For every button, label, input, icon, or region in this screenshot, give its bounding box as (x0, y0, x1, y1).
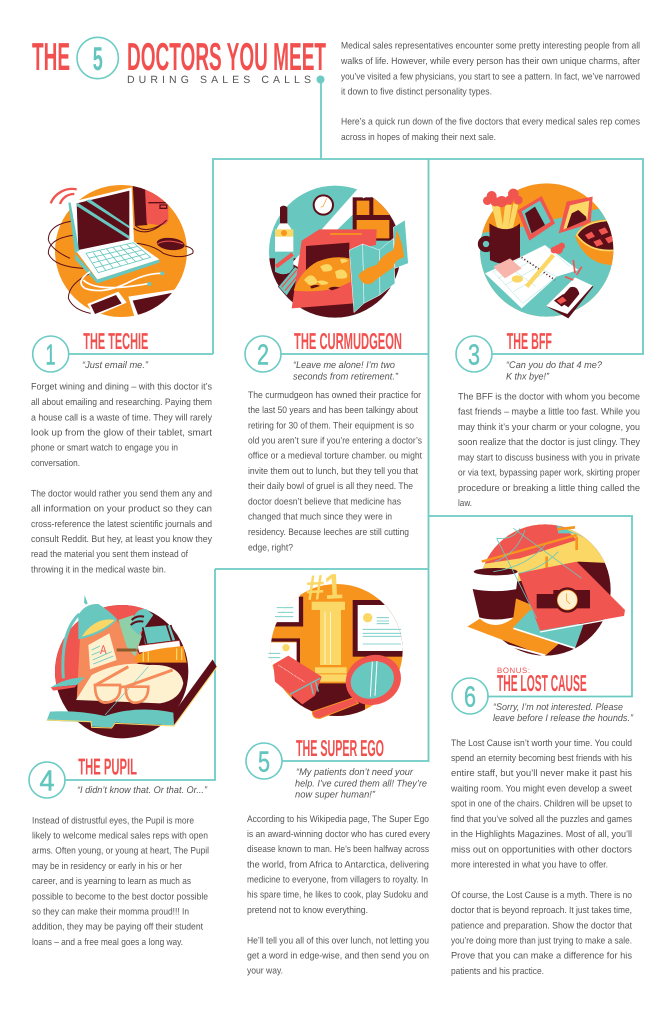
body text: arms. Often young, or young at heart, The Pupil (32, 845, 209, 856)
body text: Of course, the Lost Cause is a myth. There is no (451, 889, 632, 900)
body text: doctor that is beyond reproach. It just takes time, (451, 904, 632, 915)
illustration: laptop and devices (48, 183, 193, 318)
body text: get a word in edge-wise, and then send you on (247, 950, 429, 961)
body text: Instead of distrustful eyes, the Pupil is more (32, 814, 194, 825)
body text: look up from the glow of their tablet, smart (31, 426, 212, 437)
illustration: column, diplomas and mirror (265, 566, 408, 718)
quote: leave before I release the hounds.” (493, 713, 634, 724)
number 6 (452, 678, 488, 714)
body text: patients and his practice. (451, 965, 544, 976)
quote: “Just email me.” (82, 360, 149, 371)
body text: soon realize that the doctor is just clingy. They (458, 436, 640, 447)
quote: “Leave me alone! I’m two (293, 360, 396, 371)
body text: Prove that you can make a difference for his (451, 950, 632, 961)
body text: fast friends – maybe a little too fast. While you (458, 406, 640, 417)
title (32, 36, 326, 86)
body text (248, 389, 422, 552)
quote: “Can you do that 4 me? (506, 360, 603, 371)
panel: the pupil (29, 595, 217, 947)
intro text: across in hopes of making their next sale. (341, 131, 496, 142)
quote: help. I’ve cured them all! They’re (295, 778, 427, 789)
number 2: 2 (257, 340, 269, 372)
panel: the bff: THE BFF (507, 328, 552, 354)
number 4: 4 (40, 766, 54, 798)
number 1: 1 (46, 340, 56, 372)
quote (493, 702, 634, 724)
body text: law. (458, 497, 472, 508)
body text: spot in one of the chairs. Children will be upset to (451, 798, 632, 808)
body text: so they can make their momma proud!!! In (32, 905, 189, 916)
body text: may think it’s your charm or your cologne, you (458, 421, 640, 432)
body text: waiting room. You might even develop a sweet (450, 782, 632, 793)
body text: likely to welcome medical sales reps with open (32, 830, 208, 841)
body text: find that you’ve solved all the puzzles and games (451, 813, 632, 824)
number 5 (246, 743, 282, 779)
body text: patience and preparation. Show the doctor that (451, 919, 632, 930)
body text: loans – and a free meal goes a long way. (32, 936, 183, 947)
body text: a house call is a waste of time. They will rarely (31, 411, 212, 422)
body text: disease known to man. He’s been halfway across (247, 843, 429, 854)
number 2 (245, 336, 281, 372)
body text: more interested in what you have to offer. (451, 858, 608, 870)
body text: is an award-winning doctor who has cured every (247, 828, 430, 839)
body text (32, 814, 209, 947)
quote: seconds from retirement.” (293, 372, 399, 382)
title: DURING SALES CALLS (127, 74, 311, 86)
intro text: walks of life. However, while every person has their own unique charms, after (340, 55, 640, 66)
number 5: 5 (258, 746, 270, 778)
number 1 (33, 336, 69, 372)
heading: BONUS: (497, 666, 530, 675)
body text: may start to discuss business with you in private (458, 451, 640, 462)
body text: his spare time, he likes to cook, play Sudoku and (247, 889, 428, 900)
illustration: oven, bottle and map (263, 186, 408, 322)
illustration: lamp, open book and glasses: A (100, 643, 107, 657)
panel: the super ego: THE SUPER EGO (296, 735, 384, 761)
number 4 (29, 762, 65, 798)
body text: may be in residency or early in his or her (32, 860, 182, 871)
body text (31, 381, 212, 574)
body text: phone or smart watch to engage you in (31, 442, 178, 453)
body text: The BFF is the doctor with whom you become (458, 390, 640, 401)
body text: addition, they may be paying off their student (32, 921, 203, 932)
number 3: 3 (468, 340, 480, 372)
body text: edge, right? (248, 541, 293, 552)
intro text (340, 40, 640, 142)
body text: conversation. (31, 457, 80, 468)
title: THE (32, 36, 70, 79)
illustration: column, diplomas and mirror: #1 (305, 566, 344, 608)
body text: read the material you sent them instead of (31, 548, 188, 559)
body text: procedure or breaking a little thing called the (458, 482, 640, 493)
intro text: Medical sales representatives encounter some pretty interesting people from all (341, 40, 640, 50)
body text: consult Reddit. But hey, at least you know they (31, 533, 212, 544)
body text: all information on your product so they can (31, 503, 212, 514)
illustration: mug, photos and notebook (473, 183, 617, 320)
body text: He’ll tell you all of this over lunch, not letting you (247, 934, 429, 945)
body text: spend an eternity becoming best friends with his (451, 752, 632, 763)
body text: changed that much since they were in (248, 511, 392, 522)
body text: cross-reference the latest scientific journals and (31, 518, 212, 529)
body text: doctor doesn’t believe that medicine has (248, 495, 401, 506)
body text (458, 390, 640, 508)
body text: According to his Wikipedia page, The Super Ego (247, 813, 429, 824)
illustration: coffee, books and cobweb (467, 520, 625, 656)
body text: throwing it in the medical waste bin. (31, 563, 166, 574)
heading (497, 666, 587, 696)
quote (293, 360, 399, 382)
body text: the world, from Africa to Antarctica, delivering (247, 858, 429, 869)
body text: The doctor would rather you send them any and (31, 487, 212, 498)
body text: their daily bowl of gruel is all they need. The (248, 480, 413, 491)
intro text: Here’s a quick run down of the five doctors that every medical sales rep comes (341, 116, 640, 127)
illustration: lamp, open book and glasses (47, 595, 217, 738)
body text: entire staff, but you’ll never make it past his (451, 767, 632, 778)
number 3 (456, 336, 492, 372)
title: 5 (93, 40, 103, 77)
body text: possible to become to the best doctor possible (32, 890, 208, 901)
body text: in the Highlights Magazines. Most of all, you’ll (451, 828, 632, 839)
panel: the techie (31, 183, 212, 574)
body text: residency. Because leeches are still cutting (248, 526, 409, 537)
panel: the super ego (246, 566, 430, 976)
body text: old you aren’t sure if you’re entering a doctor’s (248, 435, 422, 446)
body text: The Lost Cause isn’t worth your time. You could (451, 737, 632, 748)
body text: retiring for 30 of them. Their equipment is so (248, 419, 414, 430)
intro text: it down to five distinct personality types. (341, 86, 492, 97)
body text: The curmudgeon has owned their practice for (248, 389, 421, 400)
panel: the techie: THE TECHIE (83, 328, 148, 354)
quote: “My patients don’t need your (296, 767, 414, 778)
body text: all about emailing and researching. Paying them (31, 396, 212, 407)
body text: you’re doing more than just trying to make a sale. (451, 934, 632, 946)
body text: career, and is yearning to learn as much as (32, 875, 191, 886)
body text: miss out on opportunities with other doctors (451, 843, 632, 854)
quote: “I didn’t know that. Or that. Or...” (77, 785, 208, 796)
panel: the curmudgeon: THE CURMUDGEON (294, 328, 402, 354)
body text: invite them out to lunch, but they tell you that (248, 465, 418, 476)
body text (450, 737, 632, 976)
body text (247, 813, 430, 976)
panel: the curmudgeon (245, 186, 422, 552)
panel: the lost cause (450, 520, 634, 976)
body text: or via text, bypassing paper work, skirting proper (458, 467, 640, 478)
body text: pretend not to know everything. (247, 904, 368, 915)
quote: K thx bye!” (506, 372, 550, 382)
quote: now super human!” (295, 790, 376, 800)
quote (506, 360, 603, 382)
body text: office or a medieval torture chamber. ou might (248, 450, 422, 461)
intro text: you’ve visited a few physicians, you start to see a pattern. In fact, we’ve narrowed (341, 70, 640, 81)
body text: Forget wining and dining – with this doctor it’s (31, 381, 212, 392)
body text: the last 50 years and has been talkingy about (248, 404, 418, 415)
connector frame lines (65, 79, 643, 780)
panel: the pupil: THE PUPIL (78, 753, 137, 779)
quote: “Sorry, I’m not interested. Please (493, 702, 623, 713)
quote (295, 767, 427, 800)
infographic canvas: DOCTORS YOU MEET (127, 36, 326, 79)
body text: your way. (247, 965, 283, 976)
number 6: 6 (464, 682, 476, 714)
panel: the bff (456, 183, 640, 508)
body text: medicine to everyone, from villagers to royalty. In (247, 874, 428, 885)
